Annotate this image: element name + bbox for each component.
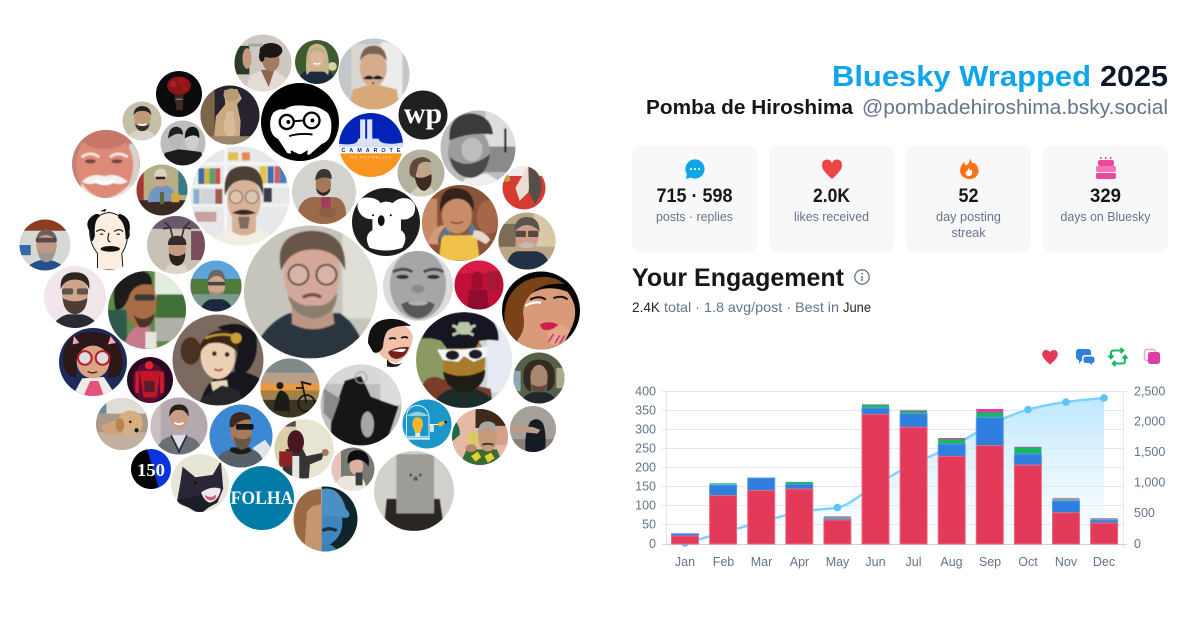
avatar: Washington Post logo: wp	[404, 98, 442, 130]
profile name and handle	[646, 97, 1168, 119]
avatar: caricature of balding man	[87, 208, 130, 270]
bar: Mar	[748, 478, 775, 544]
month labels: Nov	[1055, 555, 1078, 569]
left axis labels	[635, 384, 656, 551]
right axis labels: 1,000	[1134, 476, 1165, 490]
icon: chat bubble	[685, 159, 705, 179]
avatar: Folha logo: FOLHA	[231, 488, 293, 509]
left axis labels: 150	[635, 480, 656, 494]
engagement chart	[635, 384, 1165, 569]
avatar: Camarote da República logo: DA REPÚBLICA	[351, 154, 392, 159]
bar: Nov	[1052, 498, 1080, 544]
avatar: blonde woman	[295, 40, 339, 84]
stat value: 2.0K	[813, 186, 850, 207]
month labels: Apr	[790, 555, 809, 569]
left axis labels: 50	[642, 518, 656, 532]
title: Bluesky Wrapped	[832, 61, 1091, 93]
avatar: pop art woman	[502, 272, 580, 350]
heading: Your Engagement: Your Engagement	[632, 264, 845, 292]
left axis labels: 250	[635, 442, 656, 456]
avatar: man in front of river	[190, 260, 242, 312]
avatar: silhouette in greyscale	[320, 364, 402, 446]
avatar: Folha logo	[230, 466, 294, 530]
icon: reposts legend	[1108, 348, 1128, 366]
cumulative area	[685, 398, 1104, 544]
stat label: days on Bluesky	[1060, 210, 1151, 224]
icon: flame	[960, 158, 979, 179]
stat value: 715 · 598	[656, 186, 732, 207]
month labels: Sep	[979, 555, 1001, 569]
avatar: Camarote da República logo	[339, 113, 403, 177]
bar: Feb	[710, 483, 737, 544]
avatar: black and white cat	[171, 454, 229, 514]
avatar: bearded man illustration	[398, 150, 444, 196]
month labels: Jan	[675, 555, 695, 569]
avatar: red-lit figure	[127, 357, 173, 403]
month labels: Feb	[713, 555, 734, 569]
avatar: badge with number 150	[131, 449, 171, 489]
month labels: Jul	[906, 555, 921, 569]
left axis labels: 300	[635, 422, 656, 436]
avatar: badge with number 150: 150	[137, 460, 165, 480]
chart legend	[1042, 348, 1160, 366]
avatar: koala	[352, 188, 420, 256]
avatar: man in pirate hat and white sunglasses	[416, 312, 512, 408]
avatar: central man with glasses and dark shirt	[244, 226, 377, 358]
stat value: 329	[1090, 186, 1121, 207]
avatar: man with long dark hair	[514, 352, 564, 404]
icon: heart	[822, 160, 842, 179]
left axis labels: 100	[635, 498, 656, 512]
avatar: grey-haired man with glasses	[20, 220, 70, 270]
bar: Oct	[1014, 447, 1041, 544]
left axis labels: 400	[635, 384, 656, 398]
month labels: May	[826, 555, 850, 569]
avatar: sunset with bicycle	[260, 358, 320, 418]
avatar: laughing older man in greyscale	[383, 250, 453, 321]
left axis labels: 200	[635, 460, 656, 474]
panel: posts and replies stat	[632, 145, 757, 253]
stat label: day posting	[936, 210, 1001, 224]
avatar: child in yellow tank top	[422, 185, 501, 261]
avatar: cartoon girl with red glasses	[59, 328, 127, 396]
icon: birthday cake	[1096, 157, 1116, 179]
panel: likes stat	[769, 145, 894, 253]
avatar: Ada Lovelace portrait	[172, 314, 264, 406]
icon: heart legend	[1042, 350, 1058, 364]
panel: avatar bubble cluster	[20, 34, 580, 552]
month labels: Jun	[865, 555, 886, 569]
avatar: selfie with black hair	[332, 448, 374, 490]
panel: posting streak stat	[906, 145, 1031, 253]
bar: Jan	[672, 534, 698, 544]
avatar: two men black and white	[160, 120, 206, 166]
avatar: woman in red dress	[502, 166, 546, 210]
icon: info	[855, 270, 869, 284]
stat label: streak	[952, 226, 986, 240]
avatar: smiling man in sweater	[150, 398, 208, 454]
month labels: Dec	[1093, 555, 1115, 569]
avatar: skull with red roses	[156, 71, 202, 117]
avatar: red poster	[454, 260, 504, 310]
avatar: Camarote da República logo: CAMAROTE	[342, 148, 401, 154]
avatar: bearded man with antlers	[147, 216, 205, 274]
right axis labels	[1134, 384, 1165, 551]
avatar: man with curly hair	[234, 34, 292, 92]
avatar: shirtless man selfie	[292, 160, 356, 224]
bar: Apr	[786, 482, 813, 544]
engagement summary: 2.4K	[632, 299, 661, 315]
avatar: man with cap in black and white	[440, 110, 516, 186]
cumulative line	[685, 398, 1104, 543]
avatar: older man at table	[136, 164, 188, 216]
right axis labels: 2,000	[1134, 414, 1165, 428]
avatar: puppy on a bed	[96, 398, 148, 450]
avatar: marble statue	[200, 86, 260, 144]
avatar: man with sunglasses in profile	[108, 271, 186, 349]
profile name and handle: @pombadehiroshima.bsky.social	[862, 97, 1168, 119]
stat value: 52	[958, 186, 978, 207]
month labels: Aug	[940, 555, 963, 569]
avatar: man with drawn moustache	[338, 38, 410, 110]
avatar: man with sunglasses against blue sky	[210, 404, 272, 468]
avatar: bearded man with glasses on pale background	[44, 266, 106, 328]
right axis labels: 500	[1134, 506, 1155, 520]
profile name and handle: Pomba de Hiroshima	[646, 97, 854, 119]
month labels: Oct	[1018, 555, 1038, 569]
bar: Sep	[976, 409, 1003, 544]
avatar: caricature of smiling man	[367, 317, 417, 367]
bar: Aug	[938, 438, 965, 544]
avatar: man at bookshelf looking up	[190, 146, 290, 246]
avatar: light bulb in a birdcage	[402, 400, 452, 448]
right axis labels: 2,500	[1134, 384, 1165, 398]
left axis labels: 350	[635, 404, 656, 418]
stacked bars	[672, 404, 1118, 544]
avatar: half woman half man duotone	[292, 486, 358, 552]
avatar: Washington Post logo	[398, 90, 448, 140]
bar: Jul	[900, 410, 927, 544]
title: 2025	[1100, 61, 1168, 93]
avatar: smiling bald man	[122, 102, 162, 140]
stat label: likes received	[794, 210, 869, 224]
bar: Dec	[1091, 518, 1118, 544]
right axis labels: 1,500	[1134, 445, 1165, 459]
bar: Jun	[862, 404, 889, 544]
icon: quotes legend	[1144, 350, 1160, 364]
month labels: Mar	[751, 555, 772, 569]
right axis labels: 0	[1134, 537, 1141, 551]
month labels	[675, 555, 1115, 569]
engagement summary: June	[843, 299, 871, 315]
cumulative points	[681, 394, 1108, 547]
avatar: dark hood with hand	[510, 406, 556, 452]
left axis labels: 0	[649, 537, 656, 551]
panel: days on Bluesky stat	[1043, 145, 1168, 253]
avatar: man holding a beer	[452, 409, 508, 465]
bar: May	[824, 516, 851, 544]
icon: replies legend	[1076, 349, 1094, 365]
avatar: cartoon with round glasses	[261, 83, 339, 161]
avatar: person with paper bag over head	[374, 451, 454, 531]
avatar: Darth Vader costume	[274, 420, 334, 478]
stat label: posts · replies	[656, 210, 733, 224]
engagement summary: total · 1.8 avg/post · Best in	[664, 299, 839, 315]
avatar: man with square glasses	[498, 212, 556, 270]
avatar: older man with white moustache	[72, 125, 140, 199]
